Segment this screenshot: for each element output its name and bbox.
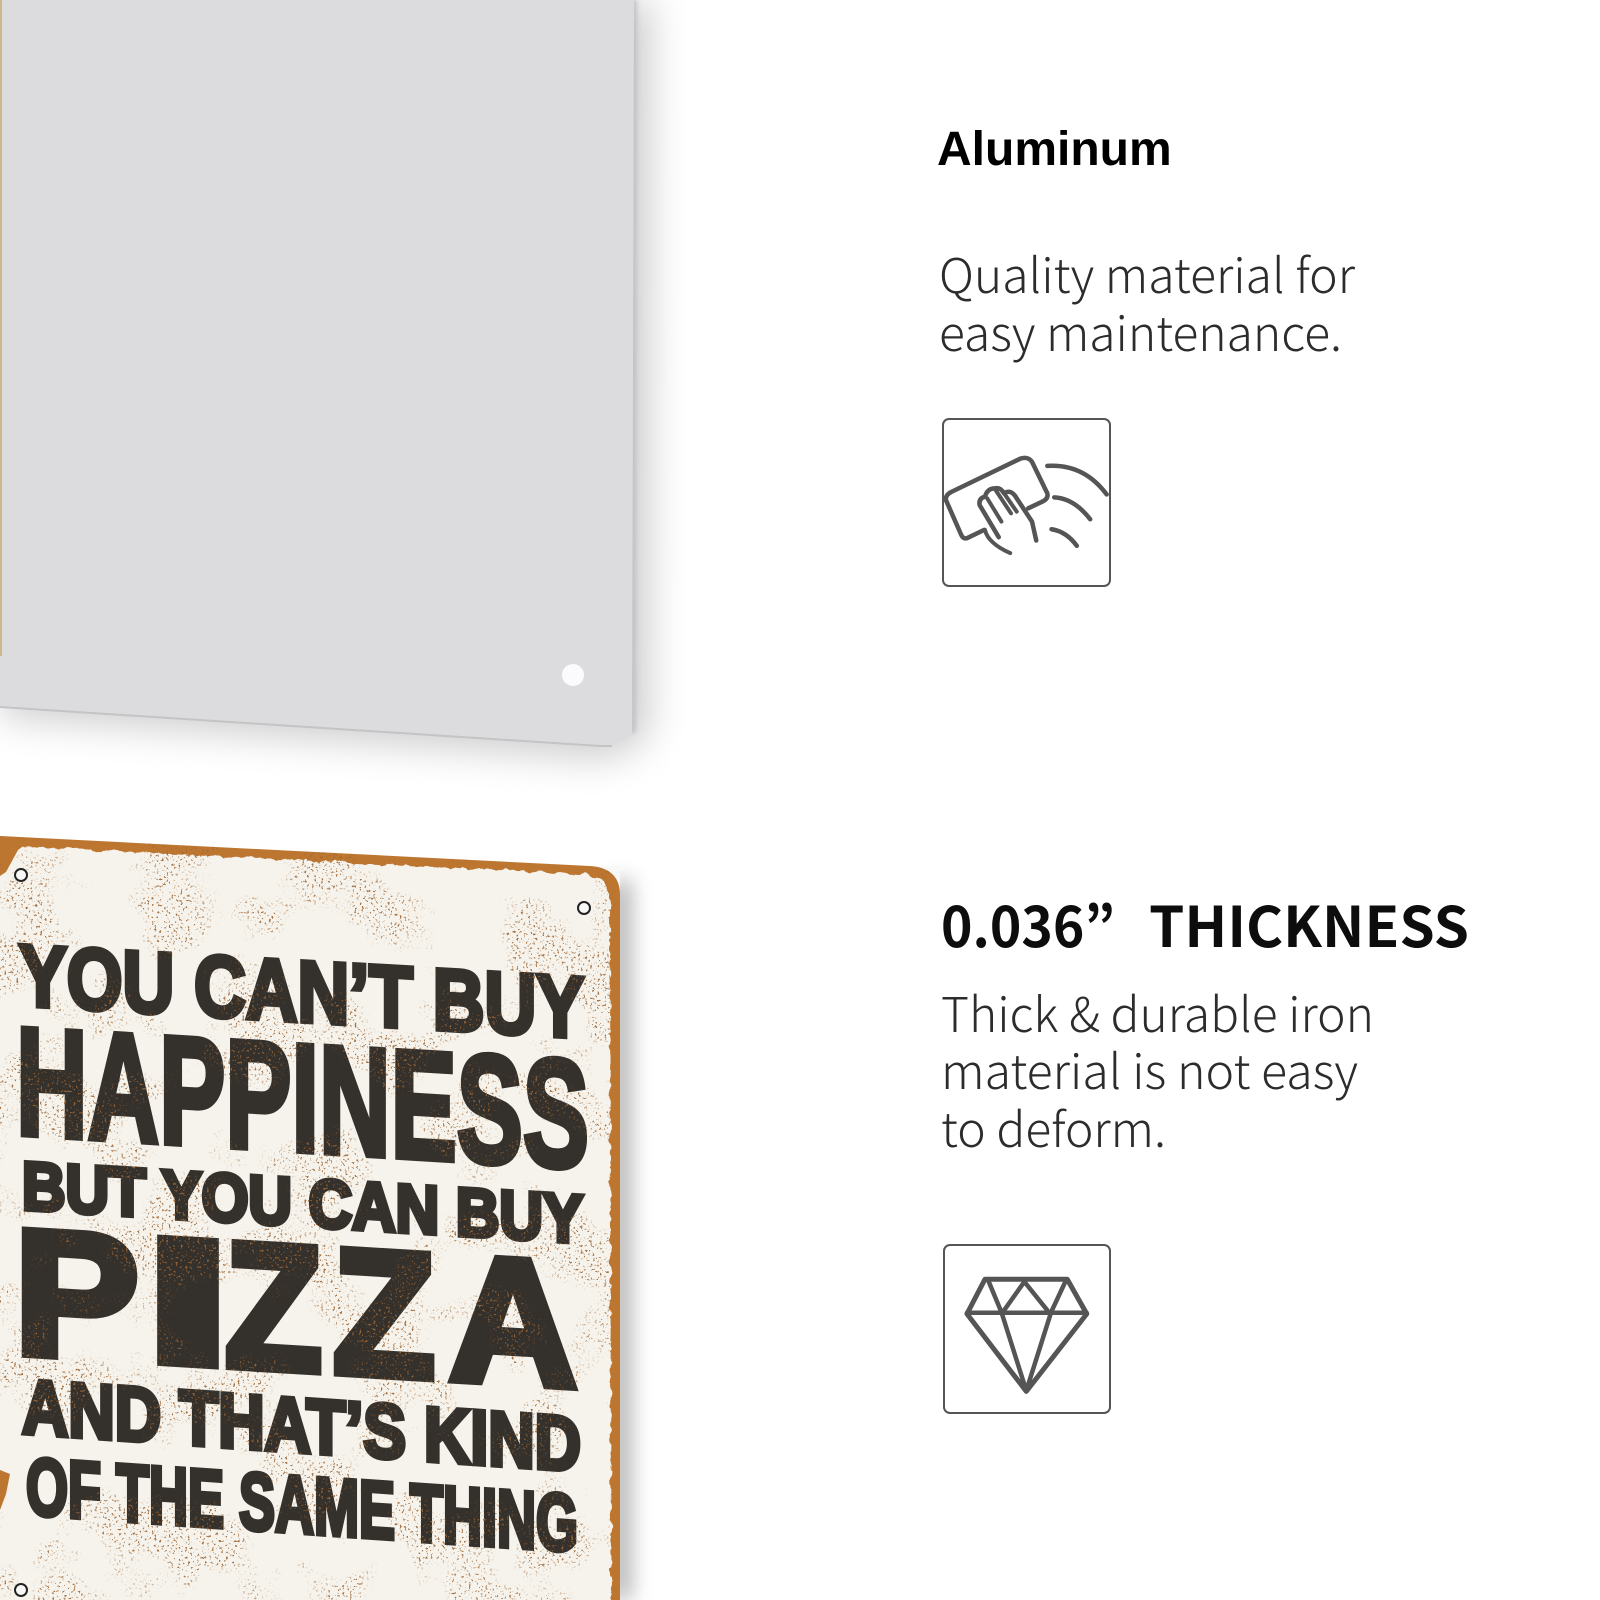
heading: thickness [941,883,1469,964]
sign message text [14,927,589,1570]
text block: thickness description: to deform. [941,1091,1166,1161]
icon: diamond [944,1245,1110,1413]
sign message text: AND THAT’S KIND [22,1364,581,1488]
sign message text: BUT YOU CAN BUY [22,1148,583,1258]
sign message text: YOU CAN’T BUY [19,927,584,1057]
text block: aluminum description: Quality material for [939,237,1356,307]
sign message text: OF THE SAME THING [26,1442,578,1570]
rust flecks over sign [0,840,610,1600]
sign message text: I [144,1200,232,1404]
heading: thickness: THICKNESS [1149,883,1469,964]
text block: thickness description: Thick & durable iron [941,976,1374,1046]
sign message text: A [449,1218,577,1425]
sign message text: HAPPINESS [16,994,589,1201]
sign message text: P [14,1192,139,1398]
panel: blank aluminum plate back [0,0,650,758]
sign mounting holes [15,869,590,1596]
plate mounting hole [562,664,584,686]
sign message text: Z [333,1211,435,1416]
text block: thickness description: material is not easy [941,1033,1358,1103]
text block: thickness description [941,976,1374,1161]
icon: hand wiping surface [943,419,1110,586]
text block: aluminum description: easy maintenance. [939,295,1342,365]
panel: vintage tin sign [0,836,630,1600]
text block: aluminum description [939,237,1356,365]
heading: Aluminum: Aluminum [937,123,1172,176]
heading: thickness: 0.036” [941,883,1115,964]
sign message text: Z [225,1205,322,1409]
